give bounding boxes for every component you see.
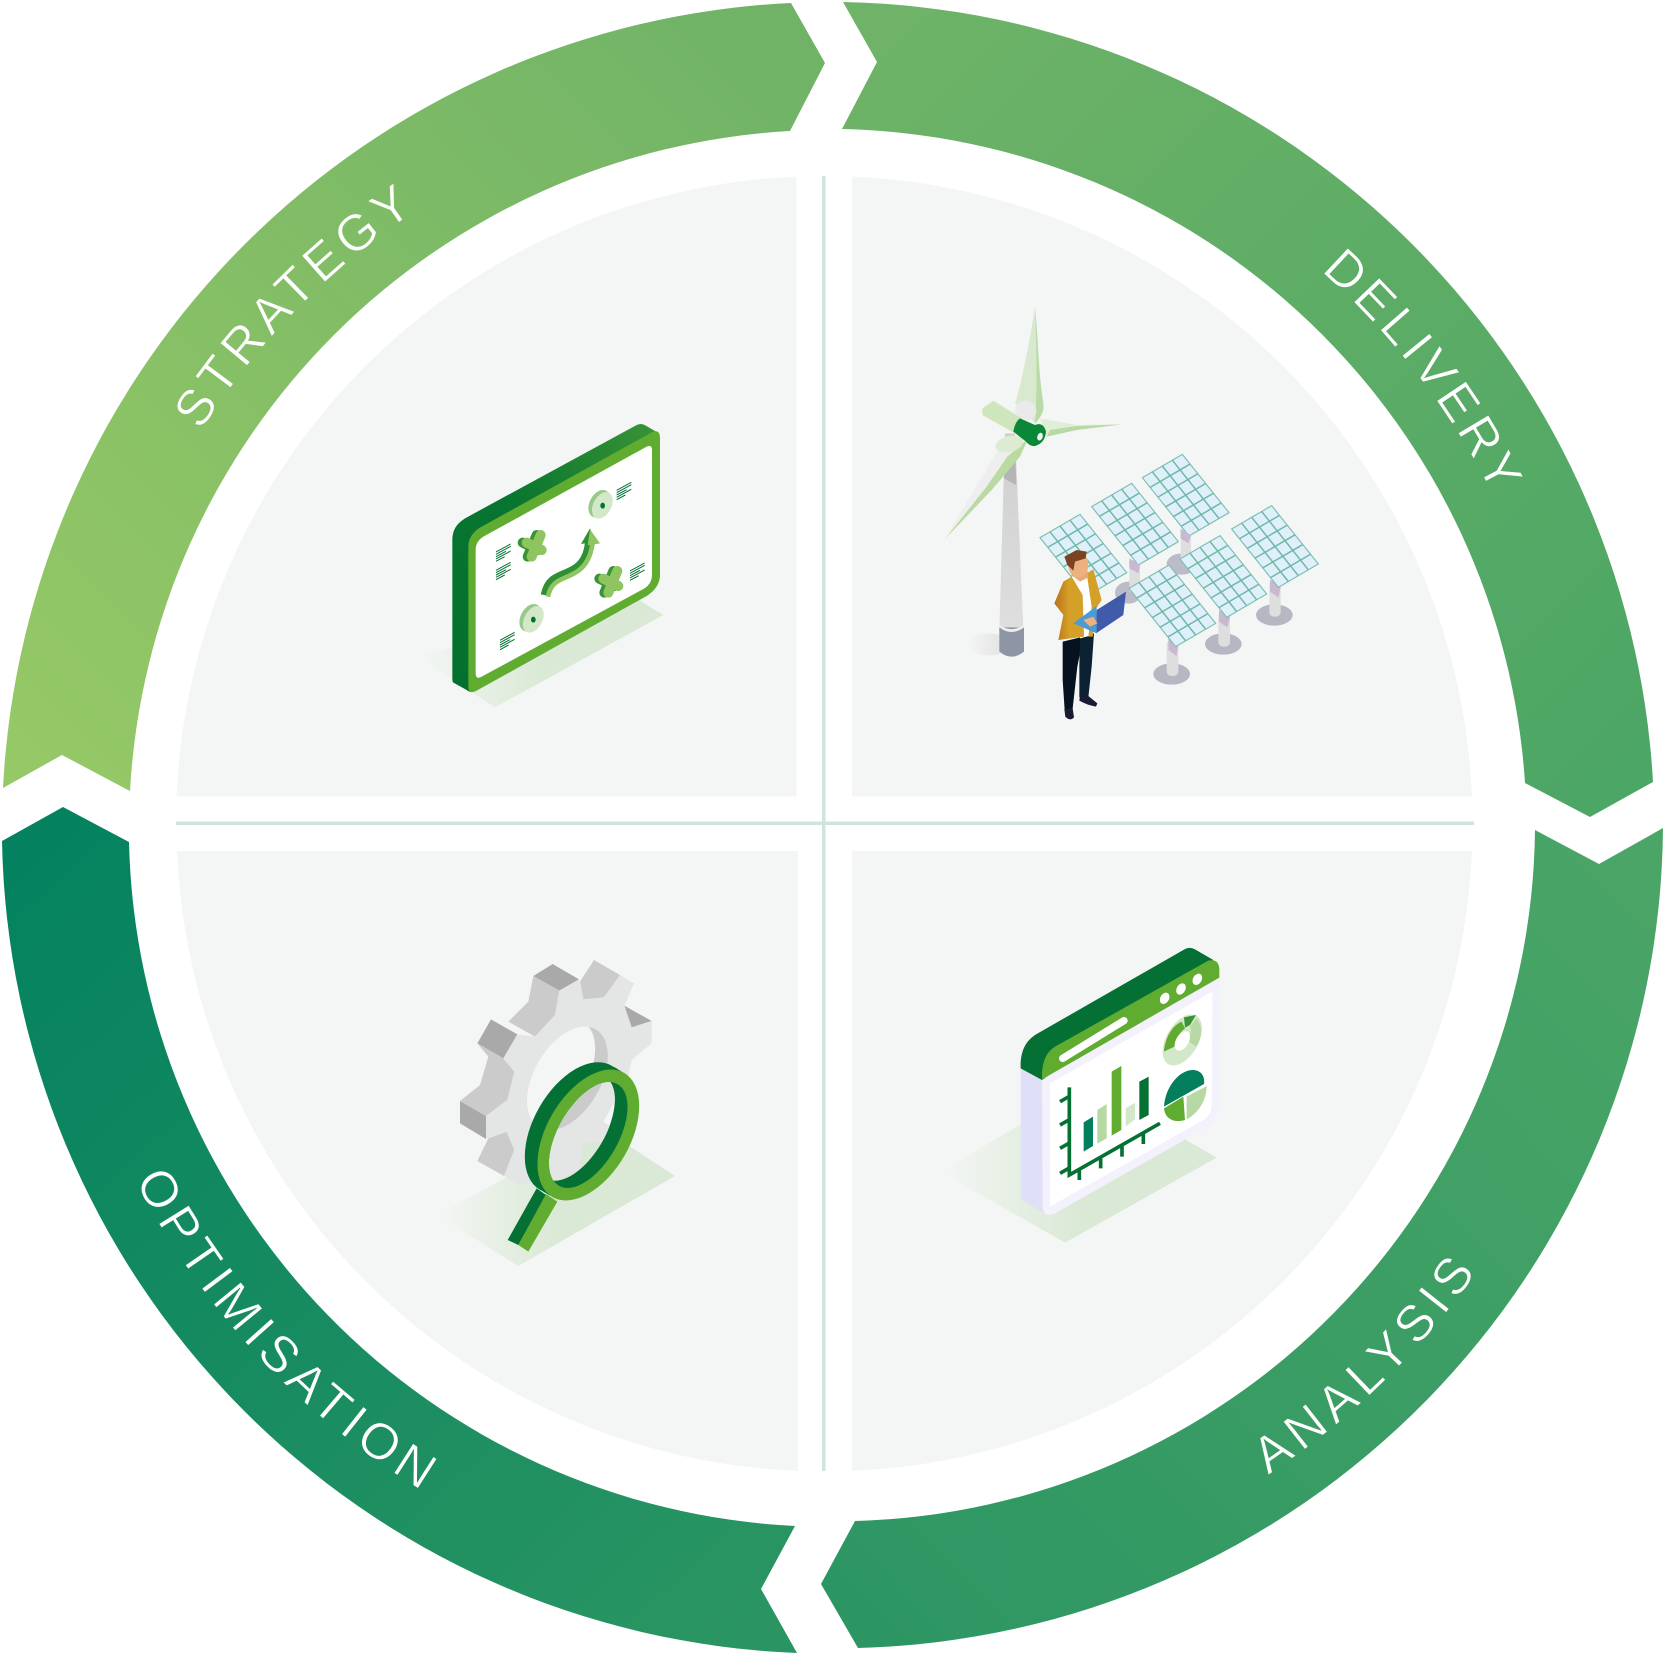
icon: analytics dashboard window xyxy=(940,948,1219,1243)
icon: gear with magnifying glass xyxy=(437,960,675,1266)
arrow segment: strategy xyxy=(3,3,825,791)
wind turbine xyxy=(945,307,1122,657)
arrow segment: analysis xyxy=(821,828,1663,1648)
icon: strategy board xyxy=(417,424,663,707)
disc marker xyxy=(515,486,617,636)
arrow segment: optimisation xyxy=(2,807,797,1653)
engineer with laptop xyxy=(1054,550,1126,719)
panel: optimisation quadrant background xyxy=(177,851,798,1471)
pie chart xyxy=(1164,1070,1207,1121)
cross marker xyxy=(523,535,618,593)
illustration: wind turbine, solar panels and engineer xyxy=(945,307,1318,719)
solar panel array xyxy=(1040,454,1318,685)
label: STRATEGY: STRATEGY xyxy=(177,184,402,425)
panel: strategy quadrant background xyxy=(176,176,796,796)
gear xyxy=(460,960,652,1184)
text notes xyxy=(496,482,645,650)
bar chart xyxy=(1060,1066,1160,1180)
donut chart xyxy=(1154,1008,1210,1072)
curved arrow xyxy=(544,528,600,597)
panel: analysis quadrant background xyxy=(852,851,1472,1471)
label: ANALYSIS: ANALYSIS xyxy=(1260,1258,1471,1475)
magnifying glass xyxy=(508,1062,640,1252)
label: OPTIMISATION: OPTIMISATION xyxy=(141,1171,436,1488)
panel: delivery quadrant background xyxy=(852,176,1472,796)
arrow segment: delivery xyxy=(842,2,1653,817)
label: DELIVERY: DELIVERY xyxy=(1324,248,1522,481)
